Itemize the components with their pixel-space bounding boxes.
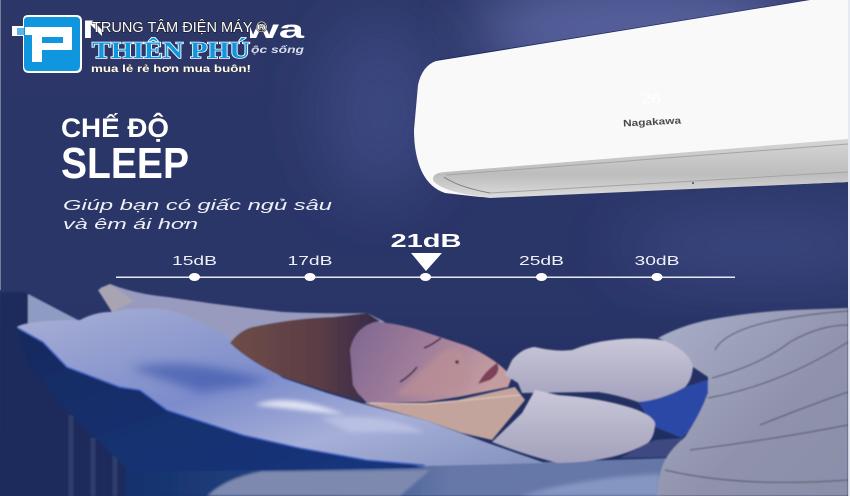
point: 25dB: 25dB xyxy=(519,253,564,268)
pyjama upper sleeve xyxy=(505,338,693,402)
unit brand: Nagakawa xyxy=(623,115,682,130)
heading: mode title: CHẾ ĐỘ xyxy=(61,112,169,143)
heading: mode title xyxy=(61,112,189,188)
pillow underside xyxy=(17,329,425,472)
point: 30dB: 30dB xyxy=(634,253,680,268)
logo: Thiên Phú xyxy=(12,15,267,75)
brand behind logo: Nagakawa xyxy=(82,16,306,44)
brand behind logo: ộc sống xyxy=(251,44,305,56)
noise level scale xyxy=(116,231,735,281)
back pillow xyxy=(100,284,385,345)
bed sheet xyxy=(125,458,670,496)
subtitle text: Giúp bạn có giấc ngủ sâu xyxy=(63,197,333,214)
logo line 3: mua lẻ rẻ hơn mua buôn! xyxy=(91,63,251,75)
point: 17dB: 17dB xyxy=(288,253,332,268)
air conditioner unit xyxy=(414,0,848,198)
point: 30dB xyxy=(634,253,680,281)
hair xyxy=(230,313,380,402)
brand behind logo: Nagakawa xyxy=(82,16,306,44)
scale line xyxy=(116,276,735,278)
point: 17dB xyxy=(288,253,332,281)
subtitle text xyxy=(63,197,333,233)
pyjama lower sleeve xyxy=(492,390,655,463)
eyes, nose and lips xyxy=(400,338,441,382)
point: 15dB xyxy=(172,253,217,281)
face xyxy=(350,322,512,403)
unit shadow line xyxy=(436,0,848,63)
front pillow xyxy=(17,308,545,466)
logo line 1: TRUNG TÂM ĐIỆN MÁY ® xyxy=(92,19,267,36)
arm xyxy=(363,387,525,440)
logo line 2: THIÊN PHÚ xyxy=(92,37,250,63)
subtitle text: và êm ái hơn xyxy=(63,216,198,233)
pyjama blue xyxy=(638,380,712,438)
louvre band xyxy=(433,139,848,198)
heading: mode title: SLEEP xyxy=(61,139,189,188)
sleeping scene xyxy=(0,284,848,496)
point: 21dB highlighted: 21dB xyxy=(390,231,462,251)
temperature display: 26 xyxy=(641,90,662,106)
point: 21dB highlighted xyxy=(390,231,462,281)
brand behind logo xyxy=(85,20,304,55)
unit body xyxy=(414,0,848,197)
point: 15dB: 15dB xyxy=(172,253,217,268)
headboard xyxy=(0,292,140,496)
logo icon xyxy=(12,15,82,73)
point: 25dB xyxy=(519,253,564,281)
pyjama strap xyxy=(620,438,682,458)
knitted blanket xyxy=(657,308,848,496)
